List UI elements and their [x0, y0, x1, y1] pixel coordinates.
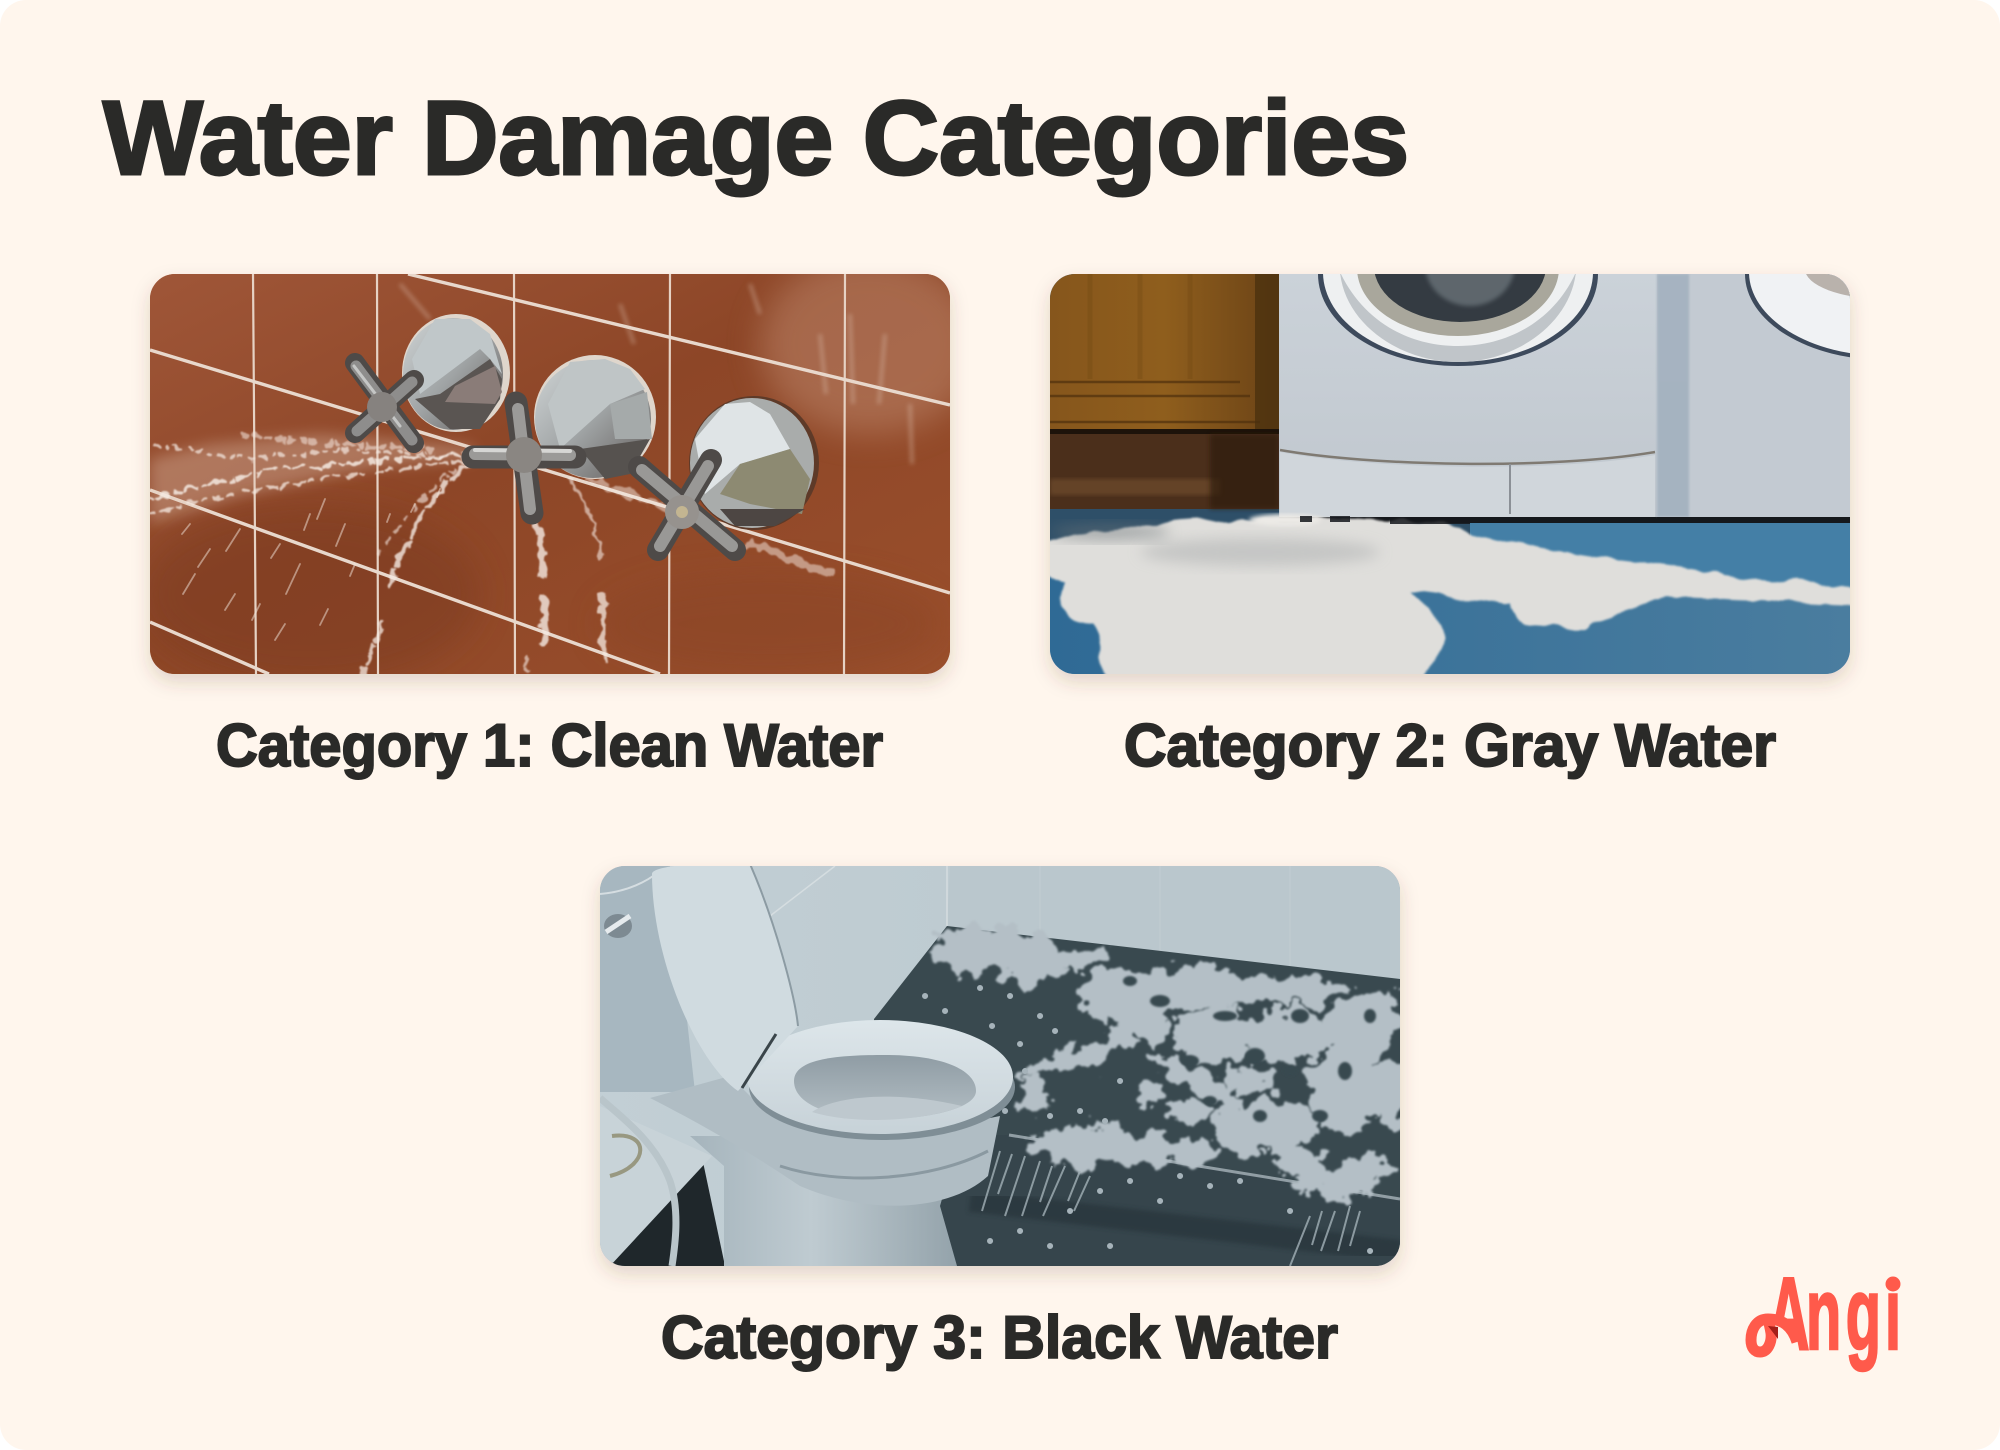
- tank: [600, 866, 695, 1092]
- spray: [150, 434, 830, 674]
- spray mist: [150, 434, 473, 524]
- lid: [652, 863, 798, 1091]
- panel: category 1 clean water: [140, 254, 980, 779]
- foam: [933, 927, 1416, 1197]
- foam: [1040, 518, 1860, 688]
- plates: [402, 314, 510, 432]
- washer 1: [1279, 274, 1657, 517]
- handles: [354, 363, 735, 550]
- cabinet: [1050, 274, 1279, 433]
- floor: [860, 926, 1400, 1266]
- title: Water Damage Categories: [103, 80, 1409, 197]
- seat: [749, 1034, 1015, 1140]
- logo: Angi: Angi: [1768, 1255, 1901, 1371]
- photo: toilet with foamy floor: [600, 863, 1416, 1266]
- door 1: [1318, 274, 1598, 366]
- dark gaps in foam: [1123, 976, 1376, 1122]
- caption: category 2: Category 2: Gray Water: [1124, 712, 1776, 779]
- caption: category 1: Category 1: Clean Water: [216, 712, 883, 779]
- bowl: [650, 1076, 1000, 1206]
- caption: category 3: Category 3: Black Water: [661, 1304, 1338, 1371]
- panel: category 2 gray water: [1042, 274, 1858, 780]
- pedestal: [690, 1136, 960, 1266]
- pipe: [600, 1098, 676, 1266]
- droplets: [925, 988, 1370, 1251]
- washer 2: [1657, 274, 1850, 517]
- photo: washing machine leaking foam: [1042, 274, 1858, 690]
- panel: category 3 black water: [600, 863, 1416, 1371]
- photo: leaking faucets on brown tile: [140, 254, 980, 684]
